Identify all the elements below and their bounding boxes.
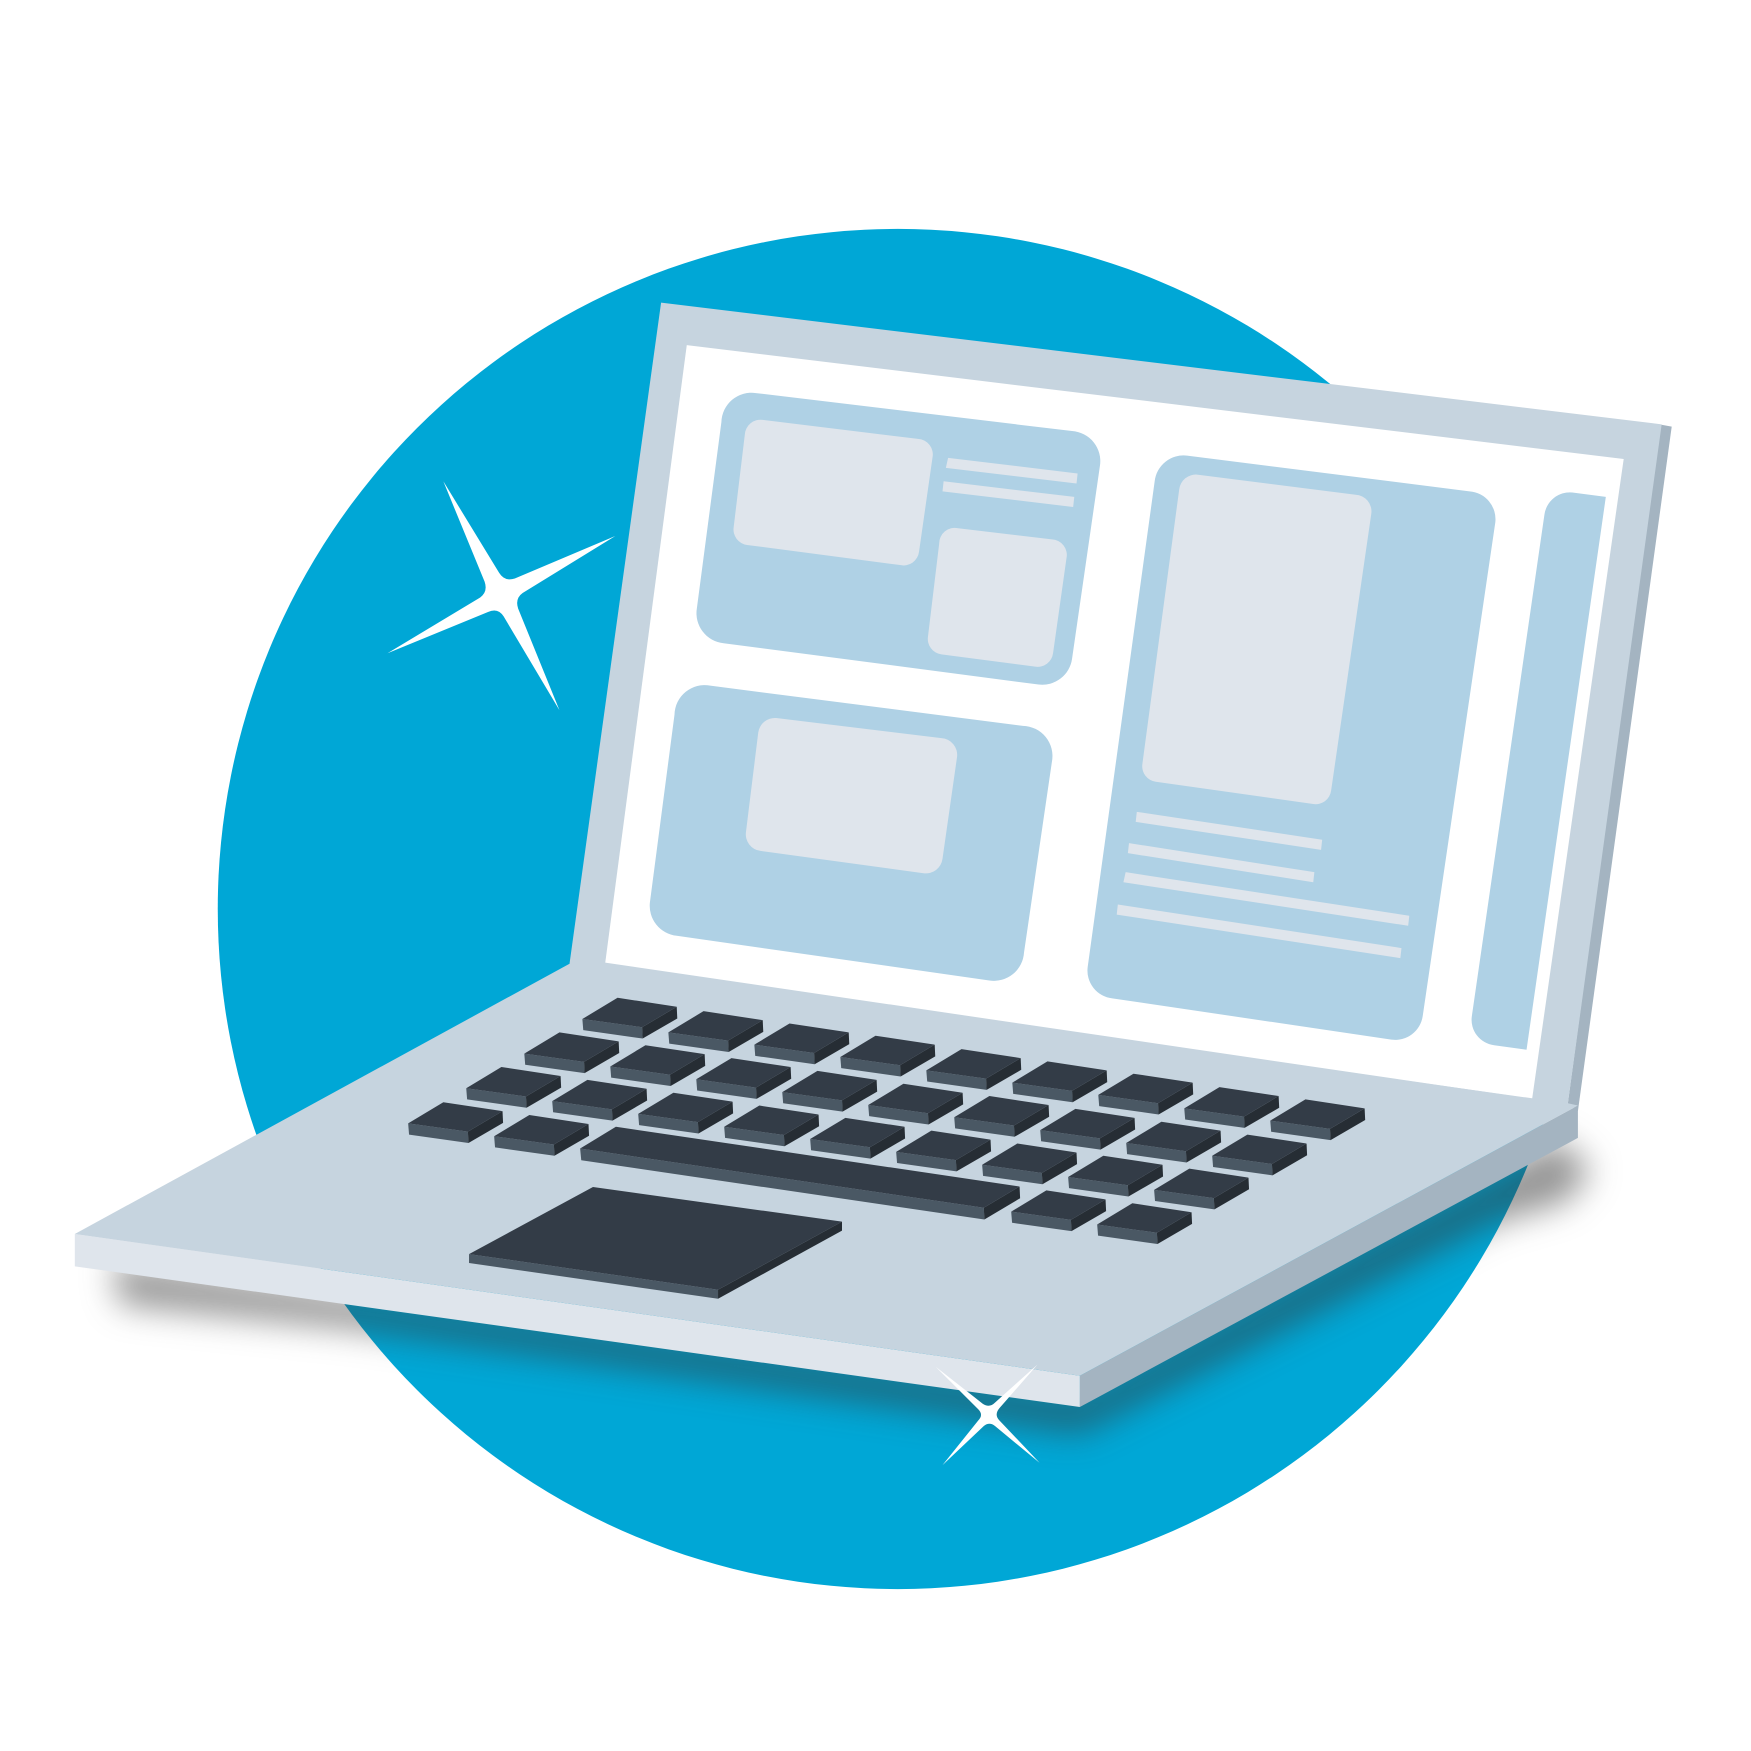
base front side: [75, 1234, 1080, 1407]
sparkle small: [936, 1365, 1040, 1465]
text lines: [1117, 812, 1409, 958]
panel: top-left card: [696, 393, 1100, 685]
panel: bottom-left card: [650, 685, 1052, 981]
space bar: [580, 1127, 1020, 1219]
lid back edge: [1568, 424, 1672, 1111]
base top: [75, 964, 1578, 1376]
panel: right sidebar: [1472, 492, 1606, 1050]
trackpad: [469, 1187, 842, 1299]
image placeholder large: [733, 420, 933, 565]
laptop: [75, 303, 1672, 1407]
text lines: [943, 458, 1078, 507]
background circle: [218, 229, 1578, 1589]
screen: [605, 345, 1624, 1099]
image placeholder: [746, 718, 957, 873]
base right side: [1080, 1106, 1578, 1407]
panel: tall centre card: [1087, 455, 1495, 1040]
sparkle large: [387, 481, 615, 710]
laptop drop shadow: [112, 1139, 1591, 1434]
image placeholder small: [928, 528, 1067, 667]
lid frame: [570, 303, 1662, 1117]
image placeholder tall: [1142, 475, 1371, 804]
keyboard: [408, 998, 1365, 1244]
